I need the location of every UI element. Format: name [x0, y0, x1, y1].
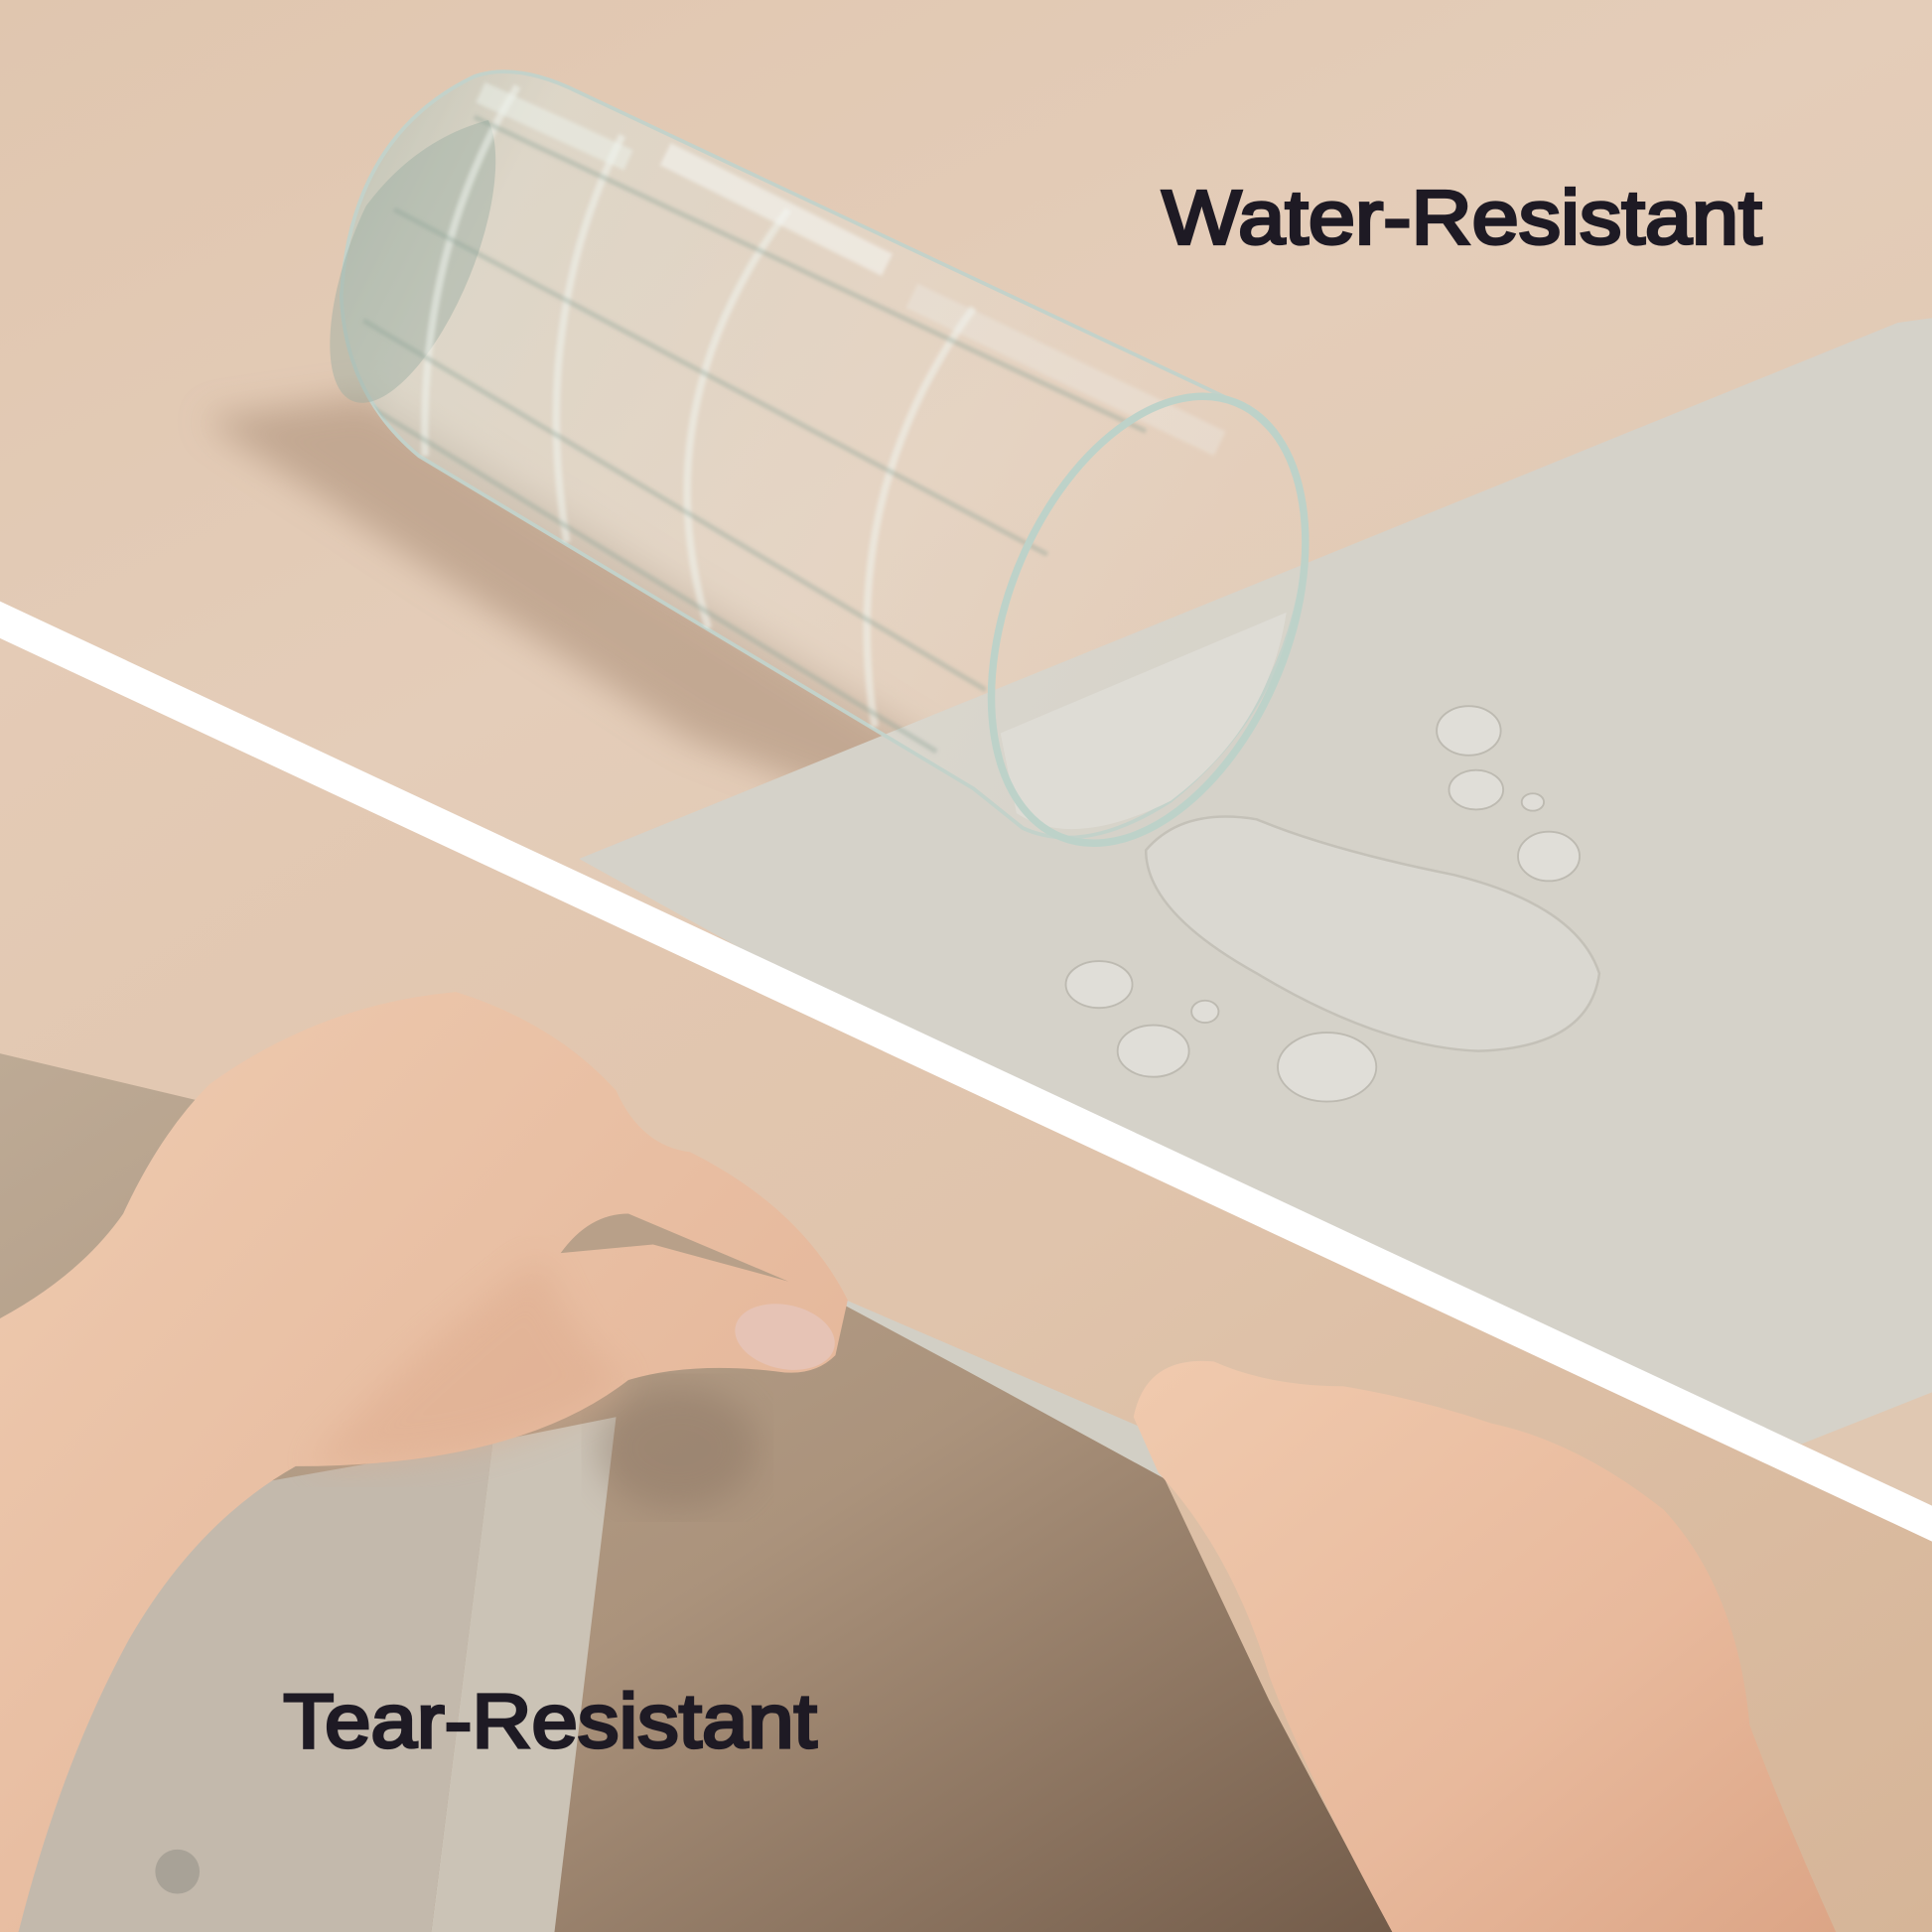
- left hand: [0, 992, 848, 1932]
- left hand shading: [308, 1257, 628, 1466]
- glass base: [330, 120, 496, 403]
- gap between thumb and finger: [561, 1213, 788, 1282]
- glass mouth: [930, 350, 1366, 890]
- panel: water-resistant scene: [217, 69, 1932, 1444]
- glass tumbler: [330, 69, 1309, 847]
- wood lower table: [0, 638, 1932, 1932]
- pocket strip: [431, 1417, 617, 1932]
- heading: Water-Resistant: Water-Resistant: [1162, 176, 1762, 261]
- icon: faint logo: [155, 1850, 200, 1894]
- paper sheet top: [579, 318, 1932, 1445]
- water puddle: [1146, 817, 1599, 1051]
- right hand: [1134, 1361, 1836, 1932]
- wood table top: [0, 0, 1932, 936]
- shadow under left hand: [598, 1386, 758, 1509]
- left thumbnail: [729, 1295, 841, 1379]
- water droplets: [1066, 706, 1580, 1102]
- heading: Tear-Resistant: Tear-Resistant: [283, 1679, 817, 1764]
- panel: tear-resistant scene: [0, 638, 1932, 1932]
- diagonal white divider: [0, 602, 1932, 1542]
- water seen in glass mouth: [1001, 613, 1287, 829]
- folder brown sheet: [0, 1053, 1392, 1932]
- glass shadow: [204, 394, 986, 863]
- glass pattern: [363, 86, 1220, 752]
- corner of lifted paper: [788, 1276, 1165, 1478]
- translucent front section: [19, 1442, 492, 1932]
